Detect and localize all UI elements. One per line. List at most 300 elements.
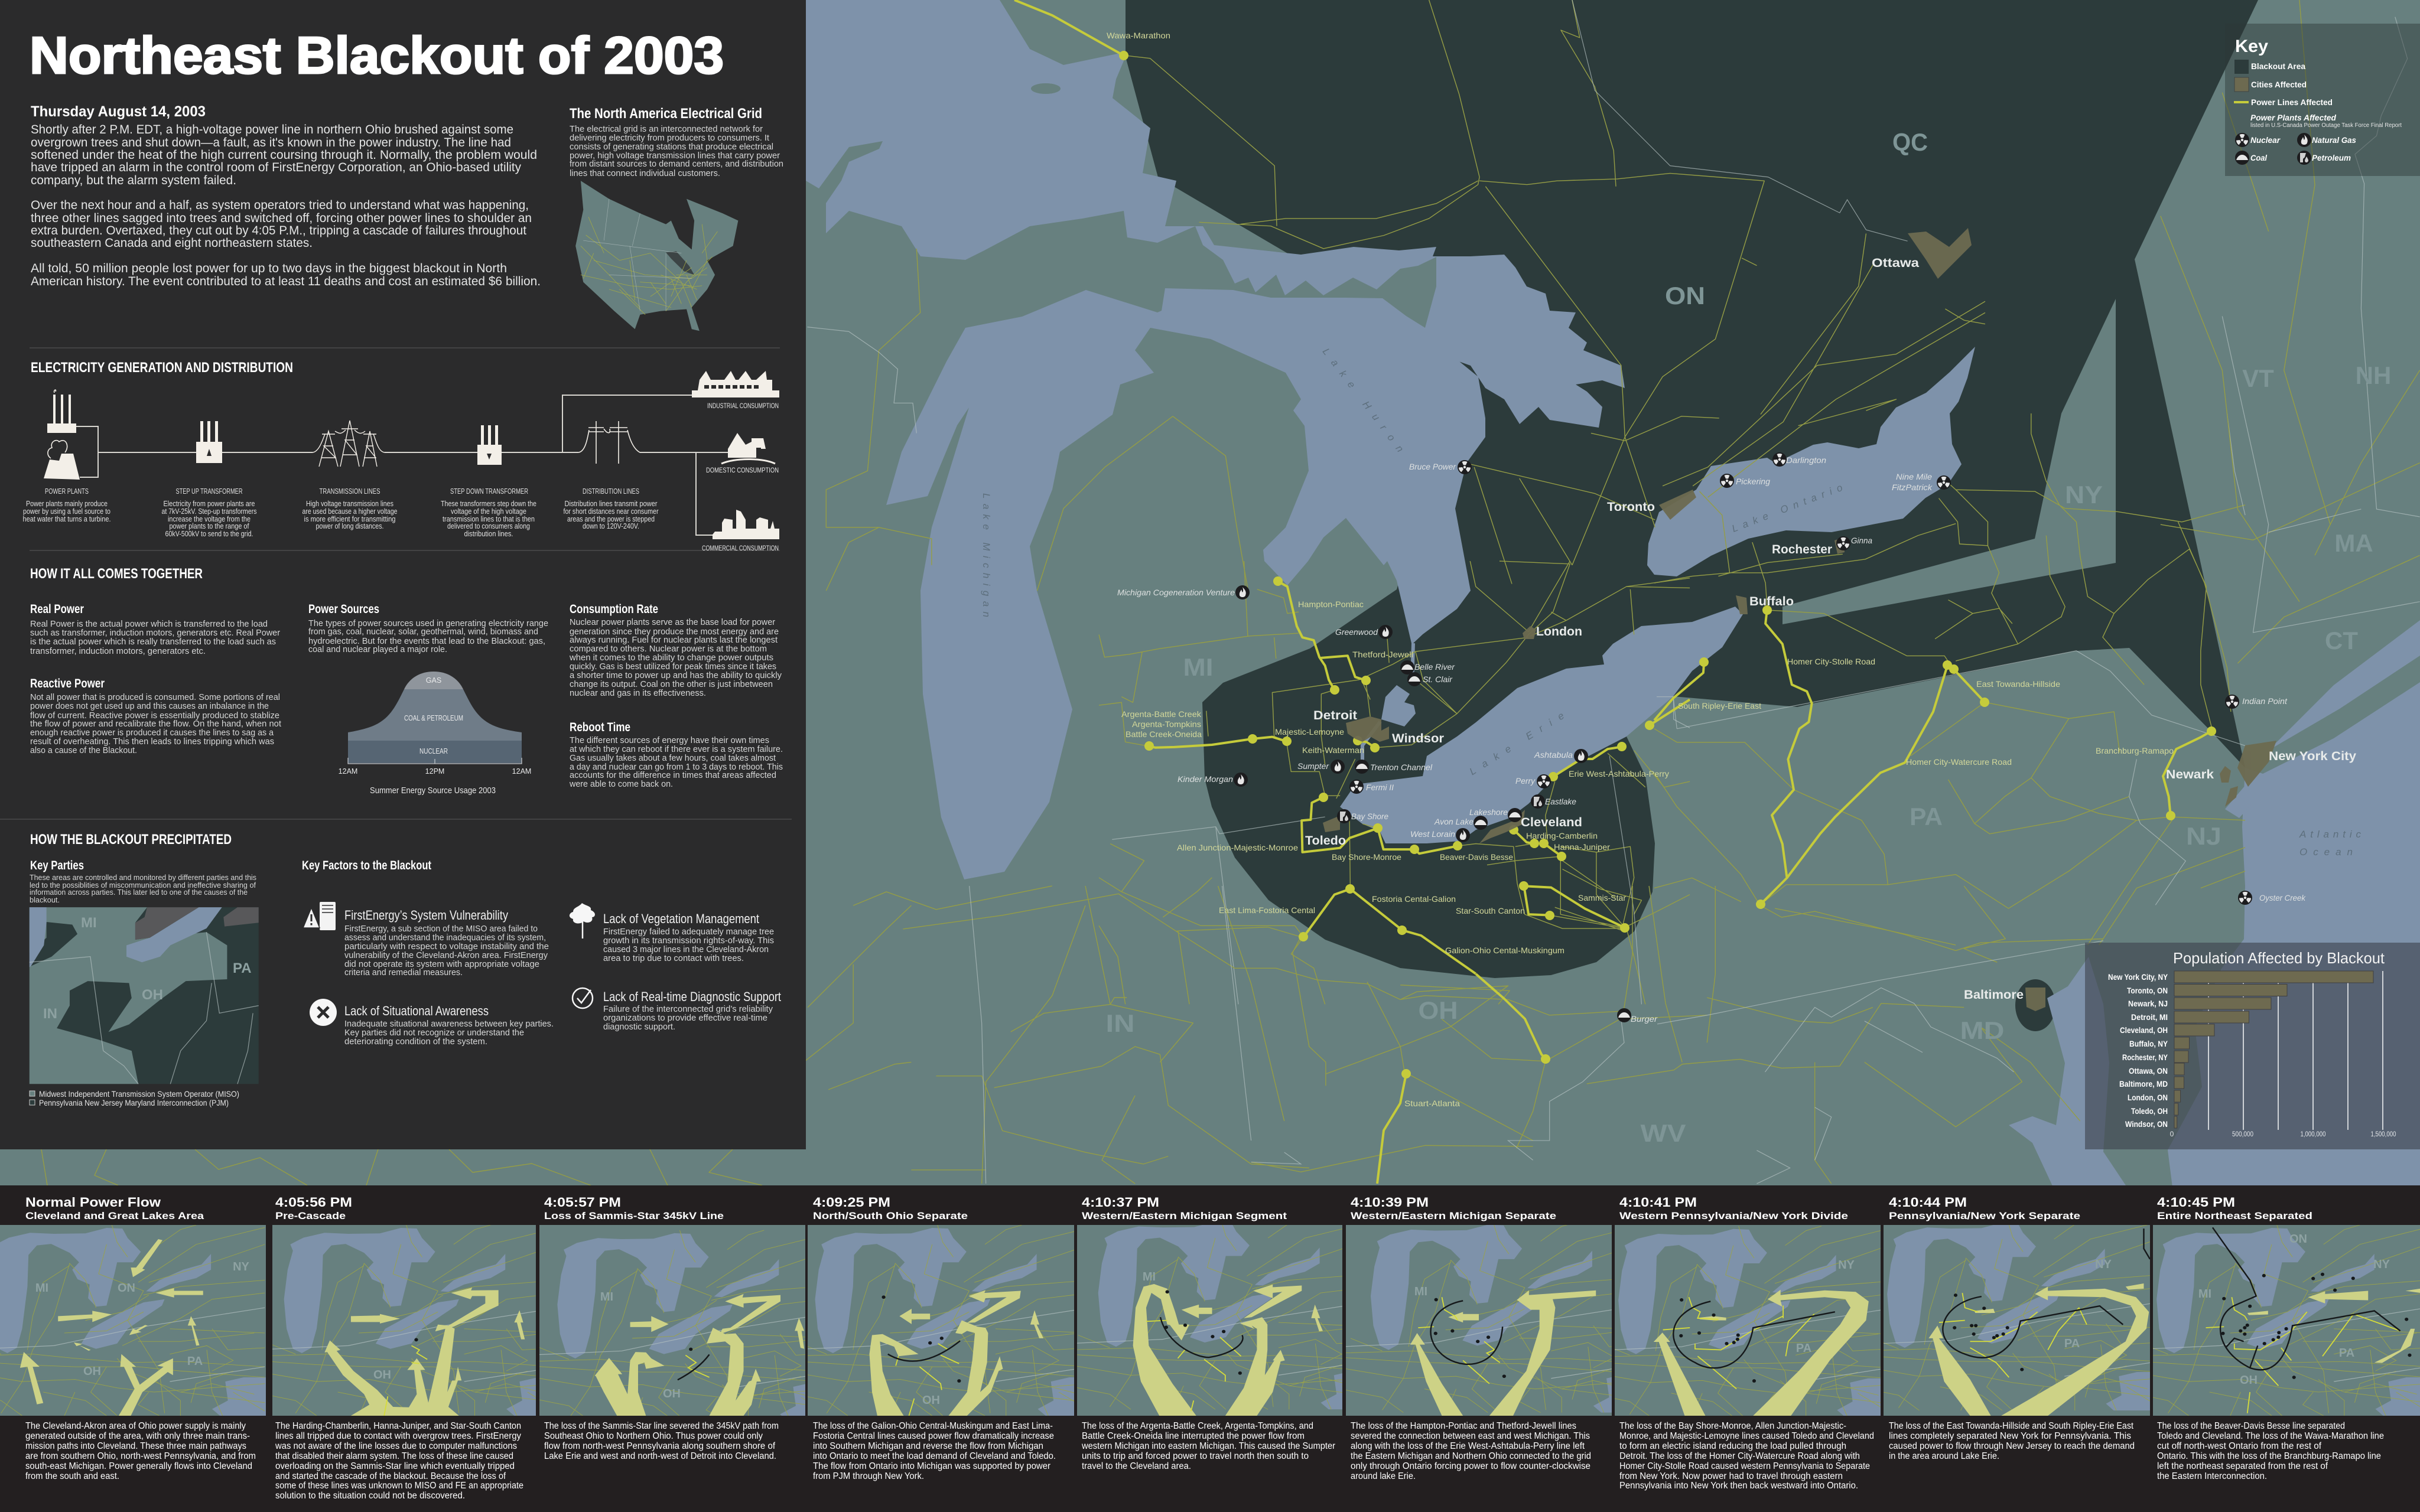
map key panel: Power Plants Affected bbox=[2250, 113, 2336, 122]
Lake Ontario bbox=[1647, 347, 1975, 576]
panel: 4:10:41 PM western Pennsylvania/New York divide: Pennsylvania into New York then back westward into Ontario. bbox=[1619, 1481, 1858, 1491]
panel: 4:10:37 PM western/eastern Michigan segment: Battle Creek-Oneida line interrupted the power flow from bbox=[1082, 1431, 1305, 1441]
chart: summer energy source usage: 12AM bbox=[339, 767, 357, 775]
icon: power plants bbox=[44, 390, 80, 480]
text block: Consumption Rate: compared to others. Nuclear power is at the bottom bbox=[570, 644, 767, 654]
power line labels: East Lima-Fostoria Cental bbox=[1219, 905, 1315, 915]
power line labels: Sammis-Star bbox=[1578, 893, 1626, 902]
text block: Consumption Rate: Nuclear power plants serve as the base load for power bbox=[570, 617, 775, 627]
text block: Lack of Real-time Diagnostic Support: Failure of the interconnected grid’s reliability bbox=[603, 1004, 773, 1014]
icon: tree bbox=[570, 903, 595, 939]
panel: normal power flow bbox=[0, 1195, 286, 1481]
diagram captions: generation steps: STEP UP TRANSFORMER bbox=[176, 487, 242, 496]
panel: 4:10:45 PM entire northeast separated: cut off north-west Ontario from the rest of bbox=[2157, 1441, 2322, 1451]
panel: 4:10:45 PM entire northeast separated: Ontario. This with the loss of the Branchburg-Ramapo line bbox=[2157, 1451, 2381, 1461]
affected power lines bbox=[1014, 0, 2211, 1184]
text block: FirstEnergy's System Vulnerability: criteria and remedial measures. bbox=[344, 967, 463, 977]
panel: 4:10:41 PM western Pennsylvania/New York divide: Monroe, and Majestic-Lemoyne lines caused Toledo and Cleveland bbox=[1619, 1431, 1874, 1441]
state labels: ON bbox=[1665, 282, 1705, 309]
island bbox=[1031, 83, 1061, 94]
power plants with labels: Michigan Cogeneration Venture bbox=[1117, 588, 1235, 597]
panel: 4:10:41 PM western Pennsylvania/New York divide: The loss of the Bay Shore-Monroe, Allen Junction-Majestic- bbox=[1619, 1421, 1846, 1431]
panel: 4:05:57 PM loss of Sammis-Star line: 4:05:57 PM bbox=[544, 1195, 621, 1210]
bar chart: population affected by blackout: Cleveland, OH bbox=[2120, 1025, 2168, 1035]
panel: 4:09:25 PM north/south Ohio separate: Fostoria Central lines caused power flow dramatically increase bbox=[813, 1431, 1054, 1441]
text block: Reactive Power: result of overheating. This then leads to lines tripping which was bbox=[30, 737, 274, 747]
power plants with labels: Greenwood bbox=[1335, 627, 1378, 637]
panel: 4:05:57 PM loss of Sammis-Star line bbox=[527, 1195, 854, 1461]
chart: summer energy source usage: COAL & PETROLEUM bbox=[404, 714, 463, 722]
text block: Key Parties: information across parties. This later led to one of the causes of the bbox=[30, 888, 248, 897]
panel: 4:10:37 PM western/eastern Michigan segment: Western/Eastern Michigan Segment bbox=[1082, 1210, 1287, 1221]
panel: 4:10:37 PM western/eastern Michigan segment bbox=[1068, 1195, 1394, 1471]
panel: normal power flow: ON bbox=[118, 1282, 135, 1295]
state labels: MD bbox=[1960, 1016, 2004, 1044]
panel: 4:05:57 PM loss of Sammis-Star line: Lake Erie and west and north-west of Detroit into Cleveland. bbox=[544, 1451, 776, 1461]
power plants with labels: Nine Mile bbox=[1896, 472, 1932, 481]
state labels: NH bbox=[2356, 361, 2391, 389]
icon: distribution lines bbox=[578, 421, 640, 464]
text block: The North America Electrical Grid bbox=[570, 106, 783, 178]
heading: key factors to the blackout: Key Factors to the Blackout bbox=[302, 859, 431, 872]
panel: 4:10:37 PM western/eastern Michigan segment: MI bbox=[1143, 1270, 1156, 1283]
city labels: New York City bbox=[2269, 750, 2356, 763]
panel: 4:05:57 PM loss of Sammis-Star line: MI bbox=[600, 1291, 613, 1304]
power plants with labels: Avon Lake bbox=[1434, 817, 1474, 826]
diagram captions: generation steps: delivered to consumers along bbox=[447, 522, 530, 530]
panel: 4:10:45 PM entire northeast separated bbox=[2126, 1195, 2420, 1481]
power plants with labels: Burger bbox=[1631, 1014, 1658, 1024]
power line labels: Harding-Camberlin bbox=[1526, 831, 1598, 840]
diagram captions: generation steps: STEP DOWN TRANSFORMER bbox=[450, 487, 528, 496]
lake and ocean labels: Lake Michigan bbox=[981, 493, 992, 617]
panel: 4:10:44 PM Pennsylvania/New York separate: 4:10:44 PM bbox=[1889, 1195, 1967, 1210]
power line labels: Beaver-Davis Besse bbox=[1440, 852, 1513, 862]
diagram captions: generation steps: These transformers step down the bbox=[441, 500, 536, 508]
diagram captions: generation steps: power plants to the range of bbox=[169, 522, 249, 530]
panel: 4:10:44 PM Pennsylvania/New York separate: NY bbox=[2095, 1258, 2112, 1271]
panel: 4:10:39 PM western/eastern Michigan separate bbox=[1340, 1195, 1667, 1481]
lake and ocean labels: Ocean bbox=[2299, 846, 2353, 858]
bar chart: population affected by blackout: 1,000,000 bbox=[2301, 1130, 2326, 1138]
power line labels: Erie West-Ashtabula-Perry bbox=[1569, 769, 1669, 778]
Baltimore blackout area bbox=[2015, 979, 2055, 1031]
panel: normal power flow: The Cleveland-Akron area of Ohio power supply is mainly bbox=[25, 1421, 246, 1431]
panel: 4:05:56 PM pre-cascade: Pre-Cascade bbox=[275, 1210, 346, 1221]
text block: The North America Electrical Grid: lines that connect individual customers. bbox=[570, 168, 720, 178]
thin power lines: New England bbox=[2161, 0, 2420, 663]
icon: factory bbox=[692, 371, 779, 397]
power line labels: Bay Shore-Monroe bbox=[1332, 852, 1401, 862]
icon: X in circle bbox=[310, 999, 337, 1026]
power plants with labels: Ashtabula bbox=[1534, 750, 1573, 760]
power line labels: Fostoria Cental-Galion bbox=[1372, 894, 1456, 904]
city labels: Detroit bbox=[1313, 709, 1357, 722]
power plants with labels: Oyster Creek bbox=[2259, 893, 2306, 902]
city labels: Newark bbox=[2166, 768, 2214, 781]
state labels: OH bbox=[1418, 996, 1458, 1024]
icon: server with warning bbox=[303, 902, 336, 930]
power plants with labels: St. Clair bbox=[1423, 674, 1453, 684]
text block: Lack of Situational Awareness: Key parties did not recognize or understand the bbox=[344, 1028, 524, 1038]
text block: Reactive Power: Not all power that is produced is consumed. Some portions of real bbox=[30, 692, 280, 702]
state labels: IN bbox=[1106, 1009, 1134, 1037]
lake and ocean labels: Lake Huron bbox=[1320, 346, 1406, 454]
text block: FirstEnergy's System Vulnerability: vulnerability of the Cleveland-Akron area. FirstEnergy bbox=[344, 950, 548, 960]
timeline strip background bbox=[0, 1185, 2420, 1512]
water: Lakes Superior, Huron, Michigan bbox=[806, 0, 1625, 879]
text block: Lack of Real-time Diagnostic Support: organizations to provide effective real-time bbox=[603, 1013, 767, 1023]
heading: Electricity Generation and Distribution: ELECTRICITY GENERATION AND DISTRIBUTION bbox=[31, 360, 293, 376]
bar chart: population affected by blackout: 1,500,000 bbox=[2370, 1130, 2396, 1138]
text block: Consumption Rate: generation since they produce the most energy and are bbox=[570, 627, 779, 637]
text block: Power Sources bbox=[308, 602, 548, 654]
Chesapeake Bay bbox=[2009, 957, 2127, 1187]
power line end dots bbox=[1119, 51, 2216, 1078]
chart: summer energy source usage: 12AM bbox=[512, 767, 531, 775]
city labels: Buffalo bbox=[1749, 595, 1794, 608]
text block: Power Sources: Power Sources bbox=[308, 602, 379, 616]
map key panel: Natural Gas bbox=[2312, 135, 2356, 145]
panel: 4:05:56 PM pre-cascade: was not aware of the line losses due to computer malfunctions bbox=[275, 1441, 517, 1451]
text block: Key Parties: These areas are controlled and monitored by different parties and this bbox=[30, 873, 256, 882]
text block: Reboot Time: Gas usually takes about a few hours, coal takes almost bbox=[570, 753, 776, 763]
panel: 4:09:25 PM north/south Ohio separate bbox=[785, 1195, 1111, 1481]
text block: Reactive Power: enough reactive power is produced it causes the lines to sag as a bbox=[30, 728, 274, 738]
map: key parties MISO and PJM: MI bbox=[81, 915, 97, 931]
panel: 4:10:39 PM western/eastern Michigan separate: Western/Eastern Michigan Separate bbox=[1351, 1210, 1556, 1221]
panel: 4:10:44 PM Pennsylvania/New York separate: Pennsylvania/New York Separate bbox=[1889, 1210, 2080, 1221]
thin power lines: Ohio, Indiana, West Virginia, Maryland bbox=[804, 886, 2103, 1184]
text block: Lack of Vegetation Management: growth in its transmission rights-of-way. This bbox=[603, 936, 774, 946]
text block: Lack of Real-time Diagnostic Support: diagnostic support. bbox=[603, 1022, 675, 1032]
label: commercial consumption: COMMERCIAL CONSUMPTION bbox=[702, 544, 779, 552]
power line labels: Homer City-Watercure Road bbox=[1906, 757, 2012, 767]
text block: Lack of Real-time Diagnostic Support: Lack of Real-time Diagnostic Support bbox=[603, 989, 781, 1004]
lake and ocean labels: Atlantic bbox=[2299, 829, 2361, 840]
power plants with labels: Indian Point bbox=[2242, 696, 2288, 706]
power line labels: Hanna-Juniper bbox=[1554, 842, 1610, 852]
key title: Key bbox=[2235, 37, 2268, 56]
North America mini map bbox=[575, 181, 738, 331]
panel: 4:10:41 PM western Pennsylvania/New York divide: from New York. Now power had to travel through eastern bbox=[1619, 1471, 1843, 1481]
panel: 4:09:25 PM north/south Ohio separate: from PJM through New York. bbox=[813, 1471, 924, 1481]
text block: Real Power: is the actual power which is really transferred to the load such as bbox=[30, 637, 276, 647]
diagram captions: generation steps: Power plants mainly produce bbox=[26, 500, 108, 508]
bar chart: population affected by blackout: Baltimore, MD bbox=[2119, 1079, 2168, 1089]
text block: Reactive Power: flow of current. Reactive power is essentially produced to stablize bbox=[30, 711, 279, 721]
text block: Lack of Situational Awareness bbox=[344, 1003, 554, 1047]
power plants with labels: FitzPatrick bbox=[1892, 483, 1933, 492]
chart: summer energy source usage bbox=[339, 672, 531, 796]
power plants with labels: Bruce Power bbox=[1409, 462, 1456, 471]
bar chart: population affected by blackout: Newark, NJ bbox=[2128, 999, 2168, 1008]
panel: 4:10:45 PM entire northeast separated: PA bbox=[2339, 1347, 2354, 1360]
panel: 4:05:57 PM loss of Sammis-Star line: The loss of the Sammis-Star line severed the 345kV path from bbox=[544, 1421, 779, 1431]
bar chart: population affected by blackout: 0 bbox=[2170, 1130, 2174, 1138]
bar chart: population affected by blackout: London, ON bbox=[2128, 1093, 2168, 1102]
city labels: Baltimore bbox=[1964, 988, 2024, 1002]
state labels: WV bbox=[1640, 1119, 1686, 1147]
map key panel: listed in U.S-Canada Power Outage Task Force Final Report bbox=[2250, 122, 2402, 129]
power line labels: Keith-Waterman bbox=[1302, 745, 1364, 755]
bar chart: population affected by blackout: Windsor, ON bbox=[2125, 1119, 2168, 1129]
text block: Reactive Power: Reactive Power bbox=[30, 677, 105, 690]
power plants with labels: Eastlake bbox=[1545, 797, 1576, 806]
label: domestic consumption: DOMESTIC CONSUMPTION bbox=[706, 466, 779, 474]
text block: Reboot Time: a day and nuclear can go from 1 to 3 days to reboot. This bbox=[570, 762, 783, 772]
text block: Thursday August 14, 2003: three other lines sagged into trees and switched off, forcing other power lines to shoulder an bbox=[31, 211, 532, 225]
panel: 4:10:37 PM western/eastern Michigan segment: western Michigan into eastern Michigan. This caused the Sumpter bbox=[1081, 1441, 1335, 1451]
map key panel bbox=[2225, 24, 2420, 176]
text block: Thursday August 14, 2003: Thursday August 14, 2003 bbox=[31, 103, 206, 120]
power plants with labels: Trenton Channel bbox=[1370, 762, 1433, 772]
panel: 4:10:39 PM western/eastern Michigan separate: MI bbox=[1414, 1285, 1427, 1298]
panel: 4:09:25 PM north/south Ohio separate: North/South Ohio Separate bbox=[813, 1210, 968, 1221]
diagram captions: generation steps: power by using a fuel source to bbox=[23, 507, 110, 516]
panel: 4:05:57 PM loss of Sammis-Star line: flow from north-west Pennsylvania along southern shore of bbox=[544, 1441, 776, 1451]
chart: summer energy source usage: NUCLEAR bbox=[419, 747, 448, 755]
panel: 4:10:39 PM western/eastern Michigan separate: the Eastern Michigan and Northern Ohio connected to the grid bbox=[1351, 1451, 1591, 1461]
text block: Power Sources: hydroelectric. But for the events that lead to the Blackout: gas, bbox=[308, 636, 545, 646]
panel: 4:10:45 PM entire northeast separated: ON bbox=[2289, 1233, 2307, 1246]
power line labels: Battle Creek-Oneida bbox=[1126, 729, 1202, 739]
state labels: VT bbox=[2242, 364, 2274, 392]
bar chart: population affected by blackout: Ottawa, ON bbox=[2129, 1066, 2168, 1076]
state labels: MI bbox=[1183, 653, 1214, 681]
map: key parties MISO and PJM: OH bbox=[142, 987, 163, 1003]
label: industrial consumption: INDUSTRIAL CONSUMPTION bbox=[707, 402, 779, 410]
text block: Lack of Vegetation Management bbox=[603, 911, 774, 963]
power line labels: Stuart-Atlanta bbox=[1404, 1099, 1460, 1108]
power line labels: Star-South Canton bbox=[1456, 906, 1525, 915]
power plants with labels: Fermi II bbox=[1366, 783, 1394, 792]
panel: 4:10:45 PM entire northeast separated: Toledo and Cleveland. The loss of the Wawa-Marathon line bbox=[2157, 1431, 2384, 1441]
thin power lines: Cleveland and Detroit bbox=[1099, 561, 1690, 1004]
diagram captions: generation steps: are used because a higher voltage bbox=[302, 507, 398, 516]
Lake Erie bbox=[1340, 607, 1743, 843]
panel: 4:10:39 PM western/eastern Michigan separate: severed the connection between east and west Michigan. This bbox=[1351, 1431, 1590, 1441]
panel: 4:05:56 PM pre-cascade: The Harding-Chamberlin, Hanna-Juniper, and Star-South Canton bbox=[275, 1421, 521, 1431]
lake and ocean labels bbox=[981, 346, 2361, 858]
power plants with labels: West Lorain bbox=[1410, 829, 1455, 839]
text block: Power Sources: The types of power sources used in generating electricity range bbox=[308, 618, 548, 628]
map key panel: Cities Affected bbox=[2251, 80, 2307, 89]
diagram captions: generation steps: down to 120V-240V. bbox=[583, 522, 639, 530]
panel: 4:10:37 PM western/eastern Michigan segment: 4:10:37 PM bbox=[1082, 1195, 1159, 1210]
city labels: Toledo bbox=[1305, 834, 1346, 848]
panel: 4:05:56 PM pre-cascade: 4:05:56 PM bbox=[275, 1195, 352, 1210]
land: Upper Peninsula, Manitoulin chain and Wisconsin bbox=[806, 141, 1436, 886]
power line labels: Argenta-Battle Creek bbox=[1121, 709, 1202, 719]
panel: 4:10:45 PM entire northeast separated: left the northeast separated from the rest of bbox=[2157, 1461, 2328, 1471]
panel: 4:09:25 PM north/south Ohio separate: The loss of the Galion-Ohio Central-Muskingum and East Lima- bbox=[813, 1421, 1053, 1431]
panel: 4:10:45 PM entire northeast separated: NY bbox=[2373, 1258, 2390, 1271]
diagram captions: generation steps: Electricity from power plants are bbox=[163, 500, 255, 508]
state labels: QC bbox=[1892, 128, 1928, 156]
chart title: Population Affected by Blackout bbox=[2173, 949, 2385, 967]
text block: The North America Electrical Grid: The electrical grid is an interconnected network for bbox=[570, 124, 763, 134]
diagram: connecting power line bbox=[76, 395, 732, 535]
icon: stopwatch check bbox=[573, 988, 593, 1008]
power line labels: East Towanda-Hillside bbox=[1976, 679, 2060, 689]
text block: The North America Electrical Grid: delivering electricity from producers to consumers. It bbox=[570, 133, 770, 143]
diagram captions: generation steps: distribution lines. bbox=[464, 530, 513, 538]
text block: Power Sources: from gas, coal, nuclear, solar, geothermal, wind, biomass and bbox=[308, 627, 538, 637]
text block: FirstEnergy's System Vulnerability: assess and understand the inadequacies of its system, bbox=[344, 933, 546, 943]
legend: key parties bbox=[30, 1089, 239, 1107]
panel: 4:10:45 PM entire northeast separated: Entire Northeast Separated bbox=[2157, 1210, 2312, 1221]
heading: How it all comes together: HOW IT ALL COMES TOGETHER bbox=[30, 566, 203, 582]
heading: How the blackout precipitated: HOW THE BLACKOUT PRECIPITATED bbox=[30, 832, 232, 848]
panel: 4:10:45 PM entire northeast separated: MI bbox=[2198, 1288, 2211, 1301]
city labels: Toronto bbox=[1607, 500, 1655, 514]
power line labels: South Ripley-Erie East bbox=[1678, 701, 1761, 711]
text block: Reboot Time: at which they can reboot if there ever is a system failure. bbox=[570, 744, 783, 754]
panel: 4:10:37 PM western/eastern Michigan segment: travel to the Cleveland area. bbox=[1082, 1461, 1191, 1471]
power plants with labels: Bay Shore bbox=[1351, 812, 1388, 821]
text block: The North America Electrical Grid: consists of generating stations that produce electrical bbox=[570, 142, 773, 152]
panel: 4:09:25 PM north/south Ohio separate: OH bbox=[922, 1394, 940, 1407]
text block: Lack of Vegetation Management: FirstEnergy failed to adequately manage tree bbox=[603, 927, 774, 937]
power plants with labels bbox=[1117, 452, 2306, 1024]
panel: 4:10:41 PM western Pennsylvania/New York divide: to form an electric island reducing the load pulled through bbox=[1619, 1441, 1846, 1451]
diagram captions: generation steps: 60kV-500kV to send to the grid. bbox=[165, 530, 253, 538]
thin power lines: New York and Pennsylvania bbox=[1654, 413, 2245, 945]
diagram captions: generation steps: High voltage transmission lines bbox=[306, 500, 393, 508]
diagram captions: generation steps: TRANSMISSION LINES bbox=[319, 487, 380, 496]
bar chart: population affected by blackout: Rochester, NY bbox=[2122, 1052, 2168, 1062]
panel: 4:10:44 PM Pennsylvania/New York separate: The loss of the East Towanda-Hillside and South Ripley-Erie East bbox=[1889, 1421, 2134, 1431]
city labels: Cleveland bbox=[1521, 816, 1582, 829]
panel: normal power flow: PA bbox=[187, 1355, 203, 1368]
panel: 4:09:25 PM north/south Ohio separate: into Ontario to meet the load demand of Cleveland and Toledo. bbox=[813, 1451, 1056, 1461]
panel: 4:10:39 PM western/eastern Michigan separate: only through Ontario forcing power to flow counter-clockwise bbox=[1351, 1461, 1590, 1471]
text block: Consumption Rate: a shorter time to power up and has the ability to quickly bbox=[570, 670, 782, 680]
text block: Thursday August 14, 2003: Over the next hour and a half, as system operators tried to understand what was happening, bbox=[31, 198, 529, 212]
panel: 4:10:45 PM entire northeast separated: the Eastern Interconnection. bbox=[2157, 1471, 2267, 1481]
text block: Reboot Time bbox=[569, 721, 783, 789]
power plants with labels: Ginna bbox=[1851, 536, 1872, 545]
text block: Lack of Vegetation Management: Lack of Vegetation Management bbox=[603, 911, 759, 926]
panel: normal power flow: Cleveland and Great Lakes Area bbox=[25, 1210, 204, 1221]
icon: step up transformer bbox=[196, 421, 222, 463]
panel: 4:10:44 PM Pennsylvania/New York separate: caused power to flow through New Jersey to reach the demand bbox=[1889, 1441, 2135, 1451]
New York harbor bbox=[2225, 786, 2263, 818]
panel: 4:05:56 PM pre-cascade: lines all tripped due to contact with overgrow trees. FirstEnergy bbox=[275, 1431, 521, 1441]
map key panel: Petroleum bbox=[2312, 153, 2351, 162]
text block: The North America Electrical Grid: power, high voltage transmission lines that carry power bbox=[570, 151, 780, 161]
rivers bbox=[1362, 643, 1413, 765]
legend: key parties: Pennsylvania New Jersey Maryland Interconnection (PJM) bbox=[39, 1098, 229, 1107]
panel: normal power flow: Normal Power Flow bbox=[25, 1195, 161, 1210]
panel: 4:09:25 PM north/south Ohio separate: 4:09:25 PM bbox=[813, 1195, 890, 1210]
panel: 4:10:41 PM western Pennsylvania/New York divide: Detroit. The loss of the Homer City-Watercure Road along with bbox=[1619, 1451, 1860, 1461]
panel: 4:05:56 PM pre-cascade: solution to the situation could not be discovered. bbox=[275, 1491, 465, 1501]
Atlantic Ocean bbox=[2168, 620, 2420, 1187]
text block: The North America Electrical Grid: The North America Electrical Grid bbox=[570, 106, 762, 122]
icon: transmission towers bbox=[313, 421, 385, 467]
power plants with labels: Pickering bbox=[1736, 477, 1770, 486]
power line labels: Wawa-Marathon bbox=[1107, 31, 1170, 40]
blackout area bbox=[1126, 0, 2258, 978]
map: key parties MISO and PJM: IN bbox=[43, 1006, 57, 1022]
text block: FirstEnergy's System Vulnerability: did not operate its system with appropriate voltage bbox=[344, 959, 539, 969]
power line labels: Galion-Ohio Cental-Muskingum bbox=[1445, 946, 1564, 955]
state labels bbox=[1106, 128, 2391, 1147]
panel: 4:10:44 PM Pennsylvania/New York separate: in the area around Lake Erie. bbox=[1889, 1451, 1999, 1461]
text block: Key Parties: led to the possiblities of miscommunication and ineffective sharing of bbox=[30, 881, 256, 889]
power line labels: Allen Junction-Majestic-Monroe bbox=[1177, 843, 1298, 852]
panel: 4:09:25 PM north/south Ohio separate: The flow from Ontario into Michigan was supported by power bbox=[813, 1461, 1050, 1471]
text block: Key Parties: Key Parties bbox=[30, 859, 84, 872]
text block: Lack of Vegetation Management: caused 3 major lines in the Cleveland-Akron bbox=[603, 944, 769, 954]
power plants with labels: Lakeshore bbox=[1469, 807, 1508, 817]
diagram captions: generation steps: for short distances near consumer bbox=[564, 507, 658, 516]
chart: summer energy source usage: GAS bbox=[426, 676, 441, 685]
diagram captions: generation steps: increase the voltage from the bbox=[168, 515, 251, 523]
Lake St Clair bbox=[1381, 685, 1416, 726]
panel: 4:10:41 PM western Pennsylvania/New York divide: NY bbox=[1838, 1259, 1855, 1272]
text block: Reactive Power: also a cause of the Blackout. bbox=[30, 745, 137, 755]
bar chart: population affected by blackout: New York City, NY bbox=[2108, 972, 2168, 982]
icon: step down transformer bbox=[477, 425, 502, 465]
state labels: NJ bbox=[2186, 822, 2221, 850]
text block: Reactive Power: the flow of power and recalibrate the flow. On the hand, when not bbox=[30, 719, 282, 729]
panel: normal power flow: MI bbox=[35, 1282, 48, 1295]
state labels: NY bbox=[2065, 481, 2103, 509]
text block: Lack of Vegetation Management: area to trip due to contact with trees. bbox=[603, 953, 744, 963]
text block: FirstEnergy's System Vulnerability: FirstEnergy, a sub section of the MISO area failed to bbox=[344, 924, 538, 934]
power line labels: Majestic-Lemoyne bbox=[1275, 727, 1344, 737]
panel: 4:05:56 PM pre-cascade: some of these lines was unknown to MISO and FE an appropriate bbox=[275, 1481, 523, 1491]
panel: 4:10:39 PM western/eastern Michigan separate: around lake Erie. bbox=[1351, 1471, 1416, 1481]
text block: FirstEnergy's System Vulnerability bbox=[344, 908, 549, 977]
icon: city skyline bbox=[713, 510, 779, 539]
city labels: Ottawa bbox=[1872, 256, 1919, 270]
city labels: Windsor bbox=[1392, 732, 1444, 745]
thin power lines: strip below left panel bbox=[41, 1149, 762, 1185]
text block: Thursday August 14, 2003: overgrown trees and shut down—a fault, as it's known in the power industry. The line had bbox=[31, 136, 511, 149]
power line labels: Branchburg-Ramapo bbox=[2096, 746, 2174, 755]
chart: summer energy source usage: 12PM bbox=[425, 767, 444, 775]
title: Northeast Blackout of 2003 bbox=[30, 26, 724, 84]
panel: 4:05:57 PM loss of Sammis-Star line: Southeast Ohio to Northern Ohio. Thus power could only bbox=[544, 1431, 763, 1441]
text block: Reactive Power: power does not get used up and this causes an inbalance in the bbox=[30, 701, 269, 711]
text block: Real Power: transformer, induction motors, generators etc. bbox=[30, 646, 206, 656]
text block: Consumption Rate: when it comes to the ability to change power outputs bbox=[569, 653, 773, 663]
text block: Thursday August 14, 2003 bbox=[31, 103, 541, 288]
text block: Consumption Rate: quickly. Gas is best utilized for peak times since it takes bbox=[570, 662, 776, 672]
map: key parties MISO and PJM bbox=[30, 907, 259, 1084]
bar chart: population affected by blackout: Toledo, OH bbox=[2131, 1106, 2168, 1116]
text block: Lack of Situational Awareness: Lack of Situational Awareness bbox=[344, 1003, 489, 1018]
panel: normal power flow: generated outside of the area, with only three main trans- bbox=[25, 1431, 250, 1441]
text block: Lack of Real-time Diagnostic Support bbox=[603, 989, 781, 1032]
panel: 4:10:41 PM western Pennsylvania/New York divide: Homer City-Stolle Road caused western Pennsylvania to Separate bbox=[1619, 1461, 1870, 1471]
unaffected New York wedge bbox=[1783, 299, 2116, 624]
text block: Lack of Situational Awareness: Inadequate situational awareness between key parties. bbox=[344, 1019, 554, 1029]
panel: 4:10:41 PM western Pennsylvania/New York divide: Western Pennsylvania/New York Divide bbox=[1619, 1210, 1848, 1221]
map key panel: Power Lines Affected bbox=[2251, 97, 2333, 107]
state labels: CT bbox=[2325, 627, 2358, 654]
bar chart: population affected by blackout: Toronto, ON bbox=[2127, 986, 2168, 995]
panel: normal power flow: mission paths into Cleveland. These three main pathways bbox=[25, 1441, 246, 1451]
panel: 4:10:37 PM western/eastern Michigan segment: The loss of the Argenta-Battle Creek, Argenta-Tompkins, and bbox=[1082, 1421, 1313, 1431]
text block: Consumption Rate bbox=[569, 602, 782, 698]
panel: 4:05:57 PM loss of Sammis-Star line: OH bbox=[663, 1387, 681, 1400]
bar chart: population affected by blackout: 500,000 bbox=[2232, 1130, 2253, 1138]
